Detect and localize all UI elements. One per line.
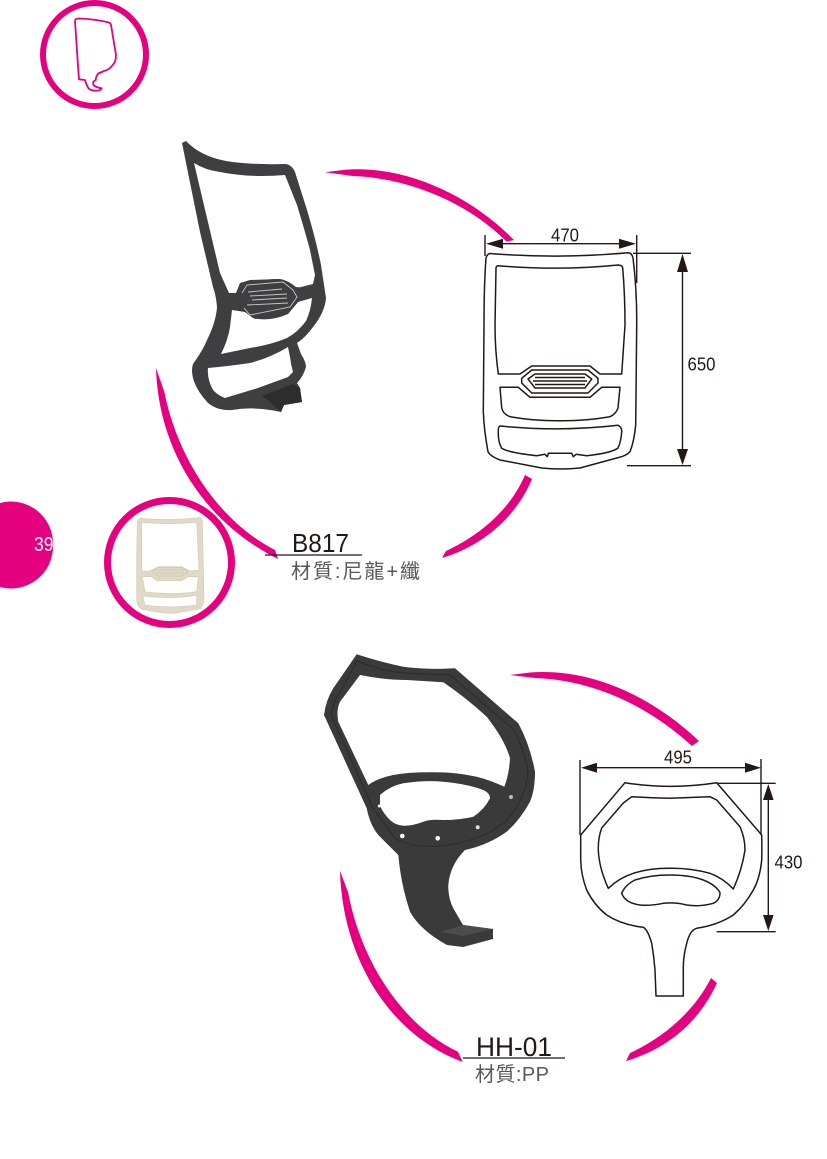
model label: HH-01: 材質:PP <box>475 1063 549 1086</box>
rivet holes <box>400 834 405 838</box>
model label: B817: 材質:尼龍+纖 <box>291 560 420 583</box>
icon: chair back category badge <box>43 3 146 106</box>
model label: HH-01 <box>463 1032 565 1086</box>
panel: B817 product <box>0 141 716 624</box>
foot pad top <box>441 925 493 936</box>
dimension: width 495 <box>580 748 761 835</box>
line drawing: B817 front view <box>483 253 637 469</box>
dimension: width 495: 495 <box>664 748 692 768</box>
model label: B817 <box>265 528 420 583</box>
line drawing: HH-01 front view <box>581 783 762 996</box>
dimension: height 650: 650 <box>688 354 716 374</box>
pink arc: lower right <box>442 475 532 558</box>
dimension: height 430 <box>717 783 802 932</box>
pink arc: lower left <box>156 368 278 559</box>
dimension: height 430: 430 <box>774 852 802 872</box>
model label: HH-01: HH-01 <box>476 1032 552 1062</box>
dimension: width 470 <box>485 226 637 283</box>
page number tab: 39 <box>34 534 54 556</box>
pink arc: top right <box>510 672 699 746</box>
panel: HH-01 product <box>324 654 802 1086</box>
page number tab <box>0 502 54 588</box>
photo: HH-01 black armrest frame <box>324 654 535 947</box>
pink arc: lower right <box>626 978 717 1061</box>
pink arc: lower left <box>340 871 463 1062</box>
model label: B817: B817 <box>292 528 349 558</box>
base bracket details <box>262 384 302 412</box>
dimension: width 470: 470 <box>551 226 579 246</box>
photo: B817 black chair back frame <box>182 141 326 412</box>
pink arc: top right <box>325 169 514 242</box>
dimension: height 650 <box>627 253 716 466</box>
inset: beige colour option <box>108 500 232 624</box>
center plate <box>232 279 306 319</box>
frame ridge <box>331 661 528 846</box>
